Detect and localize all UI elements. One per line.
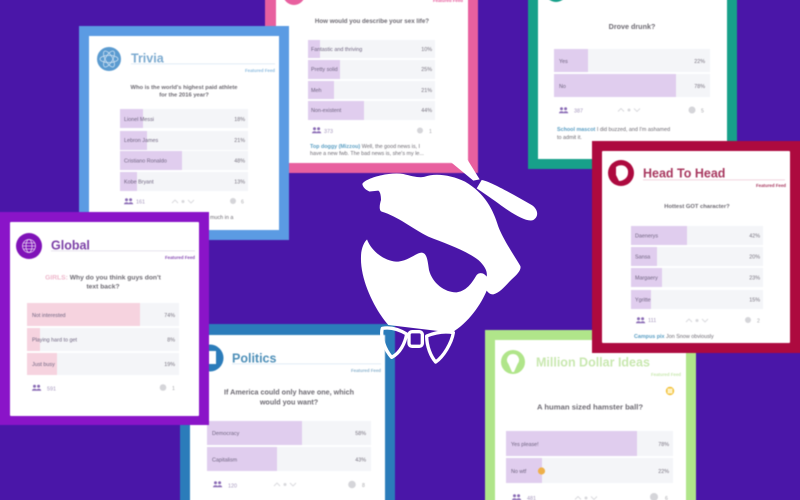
bar chart: Lionel Messi [124, 117, 154, 123]
propeller blade [477, 180, 537, 220]
bar chart: Non-existent [311, 108, 342, 114]
bar chart: Yes [559, 59, 568, 65]
bar chart: 19% [164, 362, 175, 368]
footer stats [312, 127, 432, 135]
bar chart: 22% [658, 469, 669, 475]
bar chart: 74% [164, 313, 175, 319]
bar chart: 22% [694, 59, 705, 65]
footer stats [124, 198, 244, 206]
sunglasses [352, 191, 487, 292]
footer stats [32, 384, 175, 392]
title: Million Dollar Ideas [536, 356, 650, 370]
footer stats: 373 [324, 129, 333, 135]
question: A human sized hamster ball? [537, 402, 643, 412]
panel: sex life poll [265, 0, 478, 173]
bar chart: Lebron James [124, 138, 158, 144]
bar chart: 58% [355, 431, 366, 437]
bar chart: Not interested [32, 313, 66, 319]
panel: trivia poll [79, 26, 289, 240]
bar chart: Ygritte [635, 298, 651, 304]
bar chart: 21% [421, 88, 432, 94]
bar chart [506, 431, 673, 483]
footer stats: 1 [429, 129, 432, 135]
bar chart: 23% [749, 276, 760, 282]
footer stats: 591 [47, 386, 56, 392]
question second line: for the 2016 year? [159, 92, 209, 98]
footer stats: 8 [362, 483, 365, 489]
bar chart: Meh [311, 88, 322, 94]
bar chart [207, 421, 371, 471]
question second line: would you want? [259, 398, 318, 406]
bar chart: 42% [749, 234, 760, 240]
footer stats: 120 [228, 484, 237, 490]
question second line: text back? [86, 284, 120, 290]
footer stats: 2 [757, 318, 760, 324]
question: If America could only have one, which [224, 388, 354, 396]
footer stats: 1 [172, 386, 175, 392]
icon: sex life card [283, 0, 305, 5]
footer stats [559, 106, 704, 114]
bar chart: 15% [749, 298, 760, 304]
bar chart: 48% [234, 158, 245, 164]
bar chart: Fantastic and thriving [311, 47, 362, 53]
comment: School mascot I did buzzed, and I'm ashamed [557, 127, 670, 133]
bar chart: 43% [355, 458, 366, 464]
featured label: Featured Feed [165, 255, 195, 260]
comment second line: to admit it. [557, 135, 582, 141]
featured label: Featured Feed [351, 368, 381, 373]
featured label: Featured Feed [651, 372, 681, 377]
icon: drunk card [545, 0, 567, 2]
bar chart: 78% [694, 84, 705, 90]
bar chart: Kobe Bryant [124, 180, 154, 186]
bar chart: 18% [234, 117, 245, 123]
bar chart: 44% [421, 108, 432, 114]
bar chart: 78% [658, 442, 669, 448]
bar chart [120, 109, 248, 191]
bar chart: 8% [167, 338, 175, 344]
bar chart: Yes please! [511, 442, 539, 448]
bar chart: 21% [234, 138, 245, 144]
title: Politics [232, 352, 277, 366]
title: Trivia [131, 52, 165, 66]
question: GIRLS: Why do you think guys don't [45, 274, 162, 282]
bar chart: No [559, 84, 566, 90]
bar chart: 25% [421, 67, 432, 73]
icon: atom [97, 47, 121, 71]
footer stats: 111 [648, 318, 656, 324]
bar chart: 20% [749, 254, 760, 260]
bar chart: No wtf [511, 469, 527, 475]
question: How would you describe your sex life? [315, 18, 429, 25]
title: Head To Head [643, 166, 725, 180]
propeller [448, 160, 480, 181]
comment: much in a [210, 215, 233, 221]
bar chart: Sansa [635, 254, 650, 260]
panel: drove drunk poll [528, 0, 737, 169]
bar chart: Capitalism [212, 458, 238, 464]
bar chart: Just busy [32, 362, 55, 368]
bar chart: Daenerys [635, 234, 658, 240]
featured label: Featured Feed [245, 68, 275, 73]
panel: global poll [0, 212, 209, 425]
comment: Campus pix Jon Snow obviously [634, 334, 714, 340]
panel: million dollar ideas poll [485, 330, 696, 500]
icon: globe [16, 233, 42, 259]
bar chart: Cristiano Ronaldo [124, 158, 167, 164]
bar chart [27, 303, 179, 375]
comment second line: have a new fwb. The bad news is, she's my le... [310, 151, 424, 157]
bar chart: Pretty solid [311, 67, 338, 73]
bowtie [382, 328, 453, 362]
footer stats [512, 493, 668, 500]
panel: politics poll [180, 324, 395, 500]
bar chart: 13% [234, 180, 245, 186]
footer stats: 387 [574, 108, 583, 114]
icon: politics [196, 344, 224, 372]
mascot head [361, 174, 521, 333]
bar chart: Playing hard to get [32, 338, 77, 344]
comment: Top doggy (Mizzou) Well, the good news is, I [310, 144, 420, 150]
bar chart [554, 49, 710, 97]
icon: light bulb [501, 350, 525, 374]
footer stats: 5 [701, 108, 704, 114]
featured label: Featured Feed [756, 183, 786, 188]
mascot logo [352, 160, 537, 362]
question: Who is the world's highest paid athlete [130, 85, 238, 91]
question: Drove drunk? [609, 22, 655, 31]
bar chart: 10% [421, 47, 432, 53]
footer stats: 6 [241, 200, 244, 206]
footer stats [636, 317, 760, 324]
icon: head to head [608, 160, 634, 186]
bar chart [308, 40, 435, 120]
question: Hottest GOT character? [664, 204, 730, 210]
title: Global [51, 238, 90, 252]
bar chart [631, 226, 763, 309]
bar chart: Margaery [635, 276, 658, 282]
icon: hamster emoji [666, 387, 674, 395]
bar chart: Democracy [212, 431, 240, 437]
panel: head to head poll [592, 141, 800, 353]
footer stats [213, 481, 365, 490]
footer stats: 161 [136, 200, 145, 206]
